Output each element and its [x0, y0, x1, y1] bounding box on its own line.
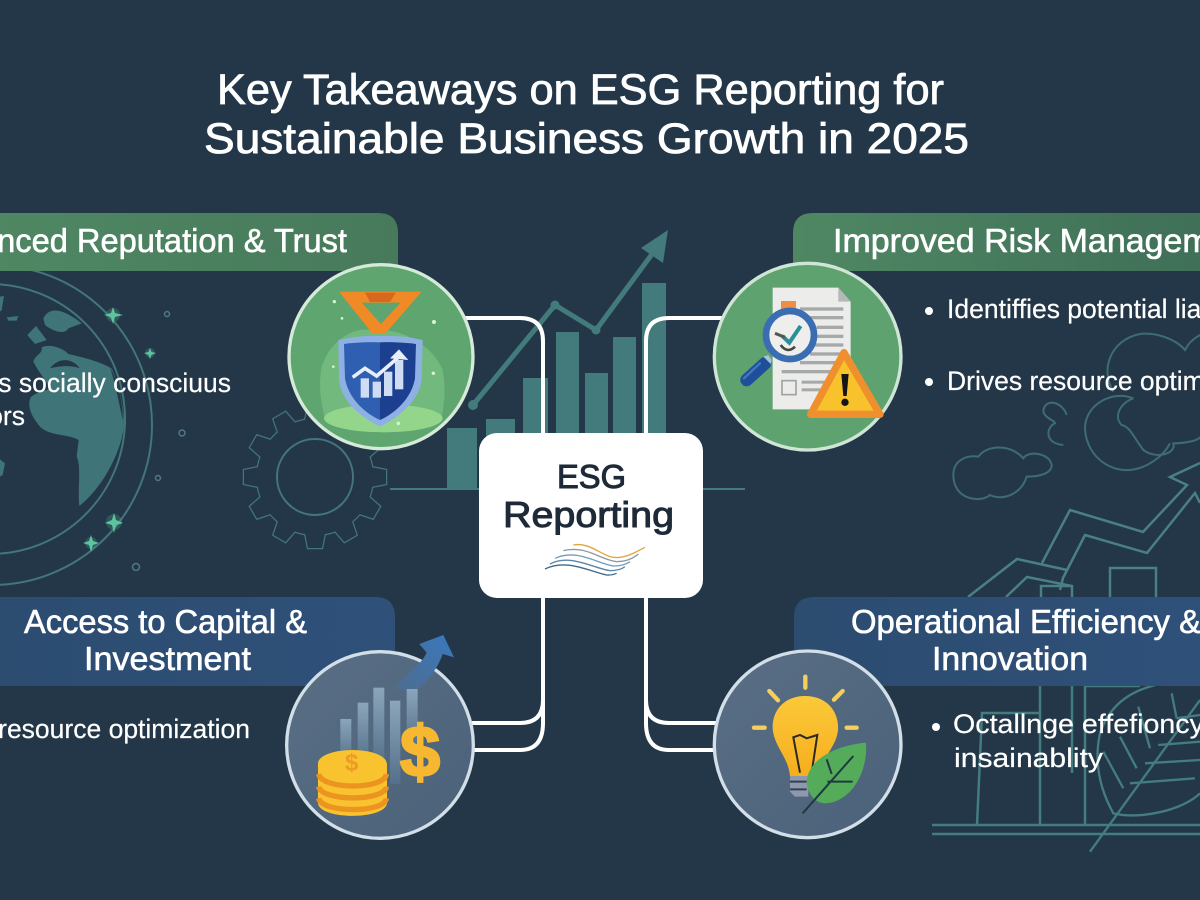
icon: medal shield [289, 265, 473, 449]
title: Key Takeaways on ESG Reporting for [217, 66, 944, 114]
background art: rising arrow outline [968, 463, 1200, 597]
panel: access to capital banner [0, 597, 395, 686]
panel: operational efficiency banner [794, 597, 1200, 686]
background art: globe [0, 265, 185, 585]
panel: operational efficiency banner: Innovation [932, 640, 1088, 677]
center box [479, 433, 703, 598]
center box: ESG [557, 458, 626, 495]
icon: coins and growth: $ [400, 712, 440, 792]
center box: Reporting [503, 494, 674, 535]
icon: wave logo [545, 545, 645, 575]
background art: clouds [953, 330, 1200, 499]
bullets: risk management [925, 294, 1200, 396]
title: Sustainable Business Growth in 2025 [204, 115, 969, 163]
background art: buildings and leaf [932, 682, 1200, 852]
connectors [455, 318, 735, 750]
icon: light bulb with leaf [714, 651, 901, 838]
bullets: efficiency: insainablity [954, 743, 1104, 773]
background art: central bar chart and growth arrow [390, 230, 745, 489]
background art: gear [244, 406, 386, 548]
panel: improved risk management banner [793, 213, 1200, 271]
panel: access to capital banner: Access to Capital & [24, 603, 307, 640]
icon: coins and growth [287, 635, 473, 838]
title [204, 66, 969, 163]
bullets: efficiency [932, 709, 1200, 773]
icon: coins and growth: $ [345, 750, 358, 777]
bullets: reputation [0, 368, 231, 431]
panel: access to capital banner: Investment [84, 640, 251, 677]
panel: operational efficiency banner: Operational Efficiency & [851, 603, 1200, 640]
icon: document with magnifier and warning [714, 263, 901, 450]
panel: enhanced reputation and trust banner [0, 213, 398, 271]
